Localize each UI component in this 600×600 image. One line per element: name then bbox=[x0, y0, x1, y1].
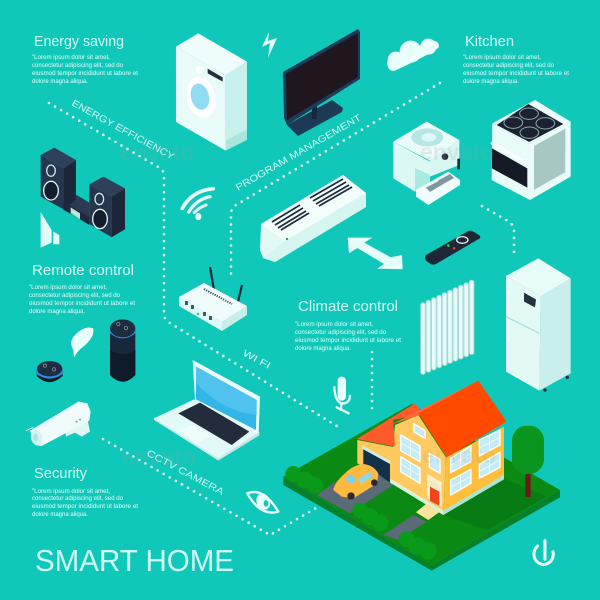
washing machine bbox=[176, 33, 247, 151]
windows bbox=[401, 424, 500, 495]
radiator bbox=[423, 282, 472, 372]
air conditioner bbox=[260, 175, 366, 262]
car bbox=[333, 464, 378, 500]
watermarks: envato bbox=[422, 442, 496, 468]
router bbox=[179, 267, 247, 331]
watermarks bbox=[120, 139, 496, 470]
text block: security: consectetur adipiscing elit, sed do bbox=[32, 496, 124, 502]
text block: security: eiusmod tempor incididunt ut labore et bbox=[32, 504, 138, 510]
label: program management: PROGRAM MANAGEMENT bbox=[234, 112, 364, 194]
dotted line: energy efficiency bbox=[49, 103, 340, 428]
text block: kitchen bbox=[463, 33, 569, 85]
building bbox=[357, 381, 507, 520]
title: SMART HOME bbox=[35, 543, 234, 578]
text block: climate control: eiusmod tempor incididunt ut labore et bbox=[295, 338, 401, 344]
text block: climate control bbox=[295, 298, 401, 352]
coffee machine bbox=[393, 122, 460, 205]
text block: remote control: dolore magna aliqua. bbox=[29, 309, 85, 315]
text block: climate control: dolore magna aliqua. bbox=[295, 346, 351, 352]
watermarks: envato bbox=[122, 444, 196, 470]
icon: speaker bbox=[41, 212, 59, 248]
lawn bbox=[283, 404, 560, 571]
text block: remote control: Remote control bbox=[32, 262, 134, 279]
dotted line: program management bbox=[231, 83, 440, 280]
text block: kitchen: "Lorem ipsum dolor sit amet, bbox=[463, 55, 541, 61]
icon: cloud bbox=[387, 39, 439, 71]
text block: security: Security bbox=[34, 465, 87, 482]
icon: wifi bbox=[182, 189, 213, 220]
security camera bbox=[26, 402, 91, 447]
door and steps bbox=[416, 474, 442, 520]
bushes bbox=[285, 466, 437, 559]
label: wi fi: WI FI bbox=[241, 348, 272, 372]
oven bbox=[491, 100, 571, 200]
text block: kitchen: consectetur adipiscing elit, sed do bbox=[463, 63, 555, 69]
dotted line: cctv camera bbox=[103, 439, 333, 535]
dotted line: climate to house bbox=[371, 352, 373, 411]
text block: climate control: "Lorem ipsum dolor sit amet, bbox=[295, 322, 373, 328]
refrigerator bbox=[506, 258, 571, 392]
text block: remote control bbox=[29, 262, 135, 315]
text block: remote control: "Lorem ipsum dolor sit amet, bbox=[29, 285, 107, 291]
laptop bbox=[154, 360, 260, 461]
label: cctv camera: CCTV CAMERA bbox=[145, 448, 226, 498]
text block: energy saving bbox=[32, 33, 138, 85]
stereo system bbox=[41, 148, 125, 237]
walls bbox=[357, 415, 504, 515]
text block: remote control: consectetur adipiscing elit, sed do bbox=[29, 293, 121, 299]
watermarks: envato bbox=[120, 139, 194, 165]
roof bbox=[357, 381, 507, 457]
icon: speech bubble bbox=[71, 327, 94, 357]
tv remote bbox=[425, 231, 480, 265]
text block: security bbox=[32, 465, 138, 518]
text block: energy saving: eiusmod tempor incididunt ut labore et bbox=[32, 71, 138, 77]
text block: security: dolore magna aliqua. bbox=[32, 512, 88, 518]
text block: energy saving: Energy saving bbox=[34, 33, 124, 50]
driveway and path bbox=[317, 465, 427, 540]
watermarks: envato bbox=[420, 139, 494, 165]
icon: lightning bbox=[262, 32, 277, 58]
text block: energy saving: "Lorem ipsum dolor sit amet, bbox=[32, 55, 110, 61]
icon: power bbox=[534, 541, 553, 564]
label: energy efficiency: ENERGY EFFICIENCY bbox=[70, 98, 177, 163]
double arrow bbox=[348, 238, 403, 269]
text block: climate control: consectetur adipiscing elit, sed do bbox=[295, 330, 387, 336]
icon: microphone bbox=[334, 377, 350, 413]
text block: kitchen: Kitchen bbox=[465, 33, 514, 50]
smart speaker and assistant bbox=[37, 319, 135, 382]
text block: kitchen: eiusmod tempor incididunt ut labore et bbox=[463, 71, 569, 77]
icon: eye bbox=[247, 491, 278, 513]
text block: energy saving: dolore magna aliqua. bbox=[32, 79, 88, 85]
text block: remote control: eiusmod tempor incididunt ut labore et bbox=[29, 301, 135, 307]
house on lawn bbox=[283, 381, 560, 571]
text block: climate control: Climate control bbox=[298, 298, 398, 315]
house shadow bbox=[443, 478, 547, 530]
text block: security: "Lorem ipsum dolor sit amet, bbox=[32, 489, 110, 495]
television bbox=[283, 29, 360, 136]
text block: kitchen: dolore magna aliqua. bbox=[463, 79, 519, 85]
text block: energy saving: consectetur adipiscing elit, sed do bbox=[32, 63, 124, 69]
dotted line: kitchen to fridge bbox=[482, 206, 514, 255]
tree bbox=[512, 426, 544, 497]
